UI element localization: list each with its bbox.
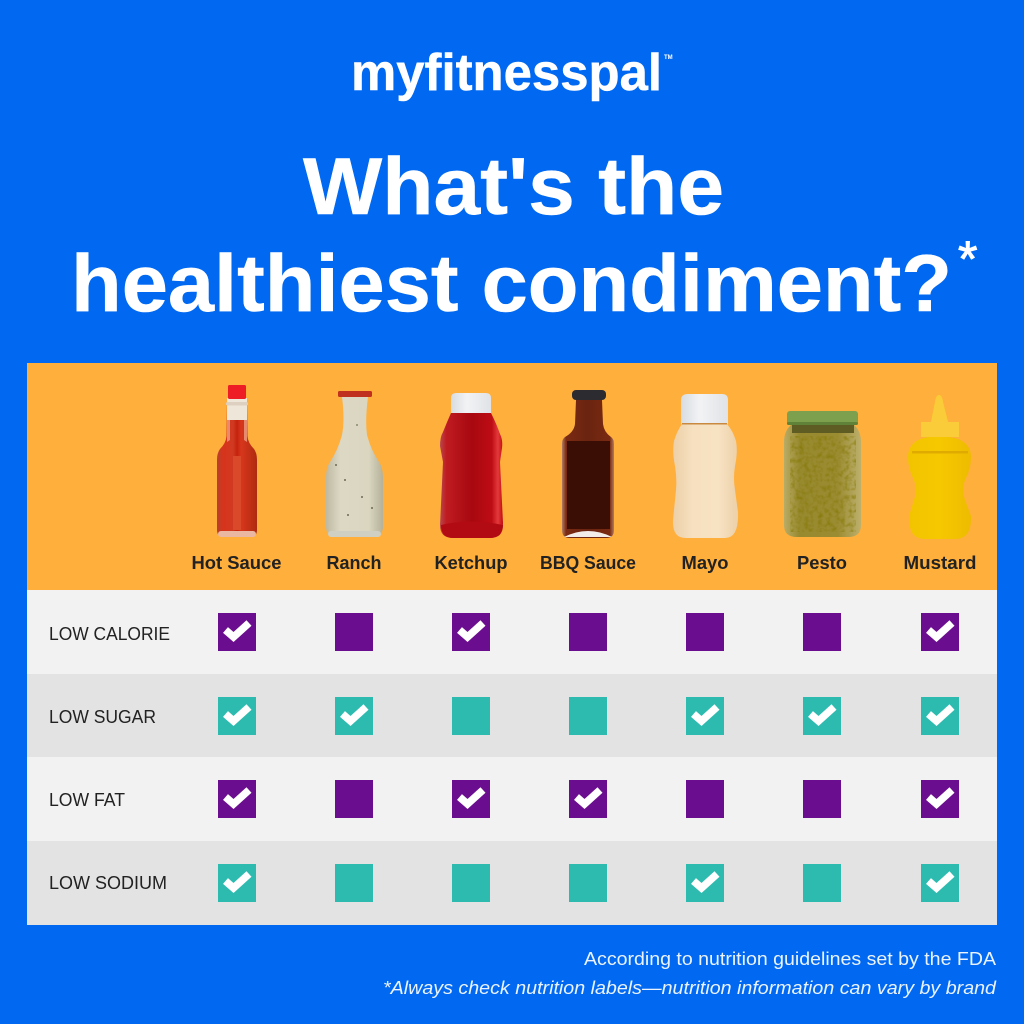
column labels: Hot Sauce: [192, 553, 282, 573]
panel: comparison table: [27, 363, 997, 925]
icon: pesto jar: [784, 411, 861, 537]
row labels: LOW SUGAR: [49, 707, 156, 727]
title: [71, 142, 977, 329]
panel: orange header band: [27, 363, 997, 590]
footnotes: According to nutrition guidelines set by the FDA: [584, 949, 996, 969]
row background: low sodium: [27, 841, 997, 925]
icon: mustard bottle: [908, 395, 971, 539]
row background: low sugar: [27, 674, 997, 757]
checkbox row: low calorie: [218, 613, 959, 651]
title: What's the: [303, 142, 724, 232]
checkbox row: low sugar: [218, 697, 959, 735]
row labels: LOW FAT: [49, 790, 125, 810]
icon: mayo bottle: [673, 394, 738, 538]
column labels: Ketchup: [434, 553, 508, 573]
row labels: [49, 624, 170, 893]
column labels: BBQ Sauce: [540, 553, 636, 573]
checkmarks: low calorie: [226, 623, 952, 637]
icon: ketchup bottle: [440, 393, 503, 538]
title: *: [958, 231, 977, 287]
column labels: Mustard: [904, 553, 976, 573]
icon: hot sauce bottle: [217, 385, 257, 537]
checkbox row: low fat: [218, 780, 959, 818]
icon: ranch bottle: [326, 391, 383, 537]
title: healthiest condiment?: [71, 239, 952, 329]
checkbox row: low sodium: [218, 864, 959, 902]
logo: myfitnesspal: myfitnesspal: [351, 44, 662, 102]
footnotes: [383, 949, 997, 998]
checkmarks: low fat: [226, 790, 952, 804]
column labels: Ranch: [326, 553, 382, 573]
column labels: Mayo: [682, 553, 728, 573]
row labels: LOW CALORIE: [49, 624, 170, 644]
checkmarks: low sugar: [226, 707, 952, 721]
row labels: LOW SODIUM: [49, 873, 167, 893]
logo: myfitnesspal: TM: [664, 55, 673, 61]
column labels: Pesto: [797, 553, 847, 573]
checkmarks: low sodium: [226, 874, 952, 888]
footnotes: *Always check nutrition labels—nutrition information can vary by brand: [383, 978, 997, 998]
column labels: [192, 553, 976, 573]
row background: low fat: [27, 757, 997, 841]
icon: bbq sauce bottle: [562, 390, 614, 538]
row background: low calorie: [27, 590, 997, 674]
